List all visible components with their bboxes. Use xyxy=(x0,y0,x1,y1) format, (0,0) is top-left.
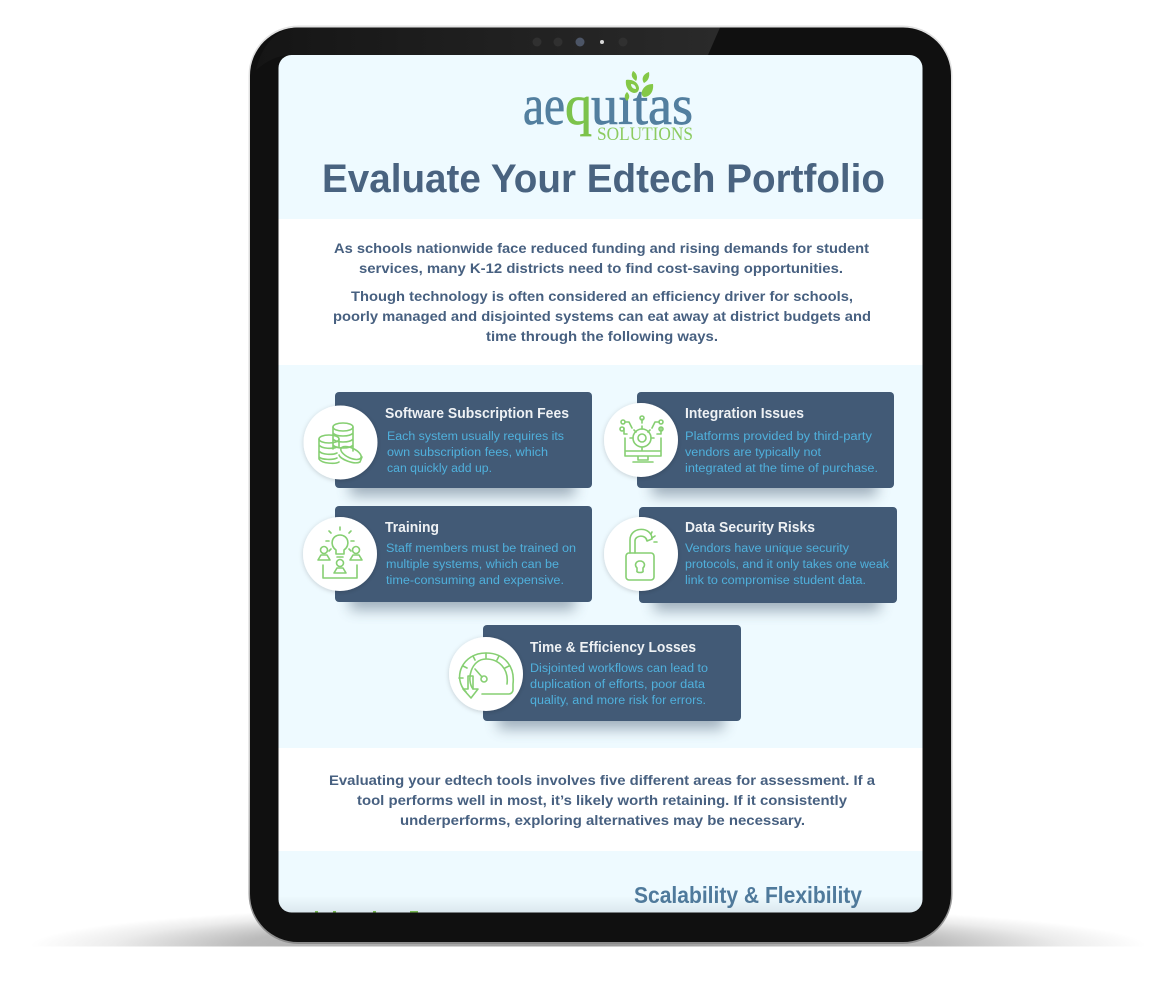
tablet bezel xyxy=(250,28,951,942)
card: software subscription fees: Software Subscription Fees xyxy=(385,406,569,422)
intro text xyxy=(333,241,871,344)
floor shadow xyxy=(66,916,1110,946)
logo: SOLUTIONS xyxy=(597,125,693,145)
tablet outer edge xyxy=(248,26,952,944)
card: integration issues: Platforms provided by third-party xyxy=(685,431,872,443)
logo: q xyxy=(565,75,592,137)
card: integration issues: integrated at the time of purchase. xyxy=(685,463,878,475)
assessment text: Evaluating your edtech tools involves five different areas for assessment. If a xyxy=(329,773,876,788)
card: software subscription fees: can quickly add up. xyxy=(387,463,492,475)
card: training: time-consuming and expensive. xyxy=(386,575,564,587)
intro text: time through the following ways. xyxy=(486,329,718,344)
card: time and efficiency losses: quality, and more risk for errors. xyxy=(530,695,706,707)
assessment text: underperforms, exploring alternatives may be necessary. xyxy=(400,813,805,828)
card: time and efficiency losses: Disjointed workflows can lead to xyxy=(530,663,708,675)
intro text: Though technology is often considered an efficiency driver for schools, xyxy=(351,289,853,304)
icon: monitor with gear xyxy=(620,416,663,462)
card: software subscription fees: own subscription fees, which xyxy=(387,447,548,459)
screen xyxy=(278,55,923,913)
assessment text: tool performs well in most, it’s likely worth retaining. If it consistently xyxy=(357,793,848,808)
card: time and efficiency losses: Time & Efficiency Losses xyxy=(530,640,696,656)
screen bottom fade xyxy=(280,903,922,912)
card: data security risks: Vendors have unique security xyxy=(685,543,849,555)
card: training: Staff members must be trained on xyxy=(386,543,576,555)
title: Evaluate Your Edtech Portfolio xyxy=(322,157,885,201)
card: data security risks xyxy=(604,507,897,611)
card: training: multiple systems, which can be xyxy=(386,559,559,571)
intro text: As schools nationwide face reduced funding and rising demands for student xyxy=(334,241,870,256)
logo xyxy=(523,71,693,145)
intro text: services, many K-12 districts need to find cost-saving opportunities. xyxy=(359,261,843,276)
camera array xyxy=(532,38,628,46)
card: software subscription fees: Each system usually requires its xyxy=(387,431,564,443)
icon: trainer and team xyxy=(318,527,362,578)
card: time and efficiency losses: duplication of efforts, poor data xyxy=(530,679,706,691)
intro text: poorly managed and disjointed systems can eat away at district budgets and xyxy=(333,309,871,324)
card: integration issues xyxy=(604,392,894,496)
icon: speedometer xyxy=(459,653,513,698)
logo leaves xyxy=(620,71,653,101)
card: data security risks: link to compromise student data. xyxy=(685,575,866,587)
card: data security risks: Data Security Risks xyxy=(685,520,815,536)
bezel sheen xyxy=(256,28,720,70)
clipped green heading tops xyxy=(315,911,418,912)
card: integration issues: vendors are typically not xyxy=(685,447,822,459)
icon: open padlock xyxy=(626,529,657,580)
heading: scalability and flexibility: Scalability & Flexibility xyxy=(634,882,862,908)
card: training xyxy=(303,506,592,610)
assessment text xyxy=(329,773,876,828)
tablet device xyxy=(248,26,952,944)
section backgrounds xyxy=(278,55,923,913)
logo: uitas xyxy=(591,75,693,137)
card: integration issues: Integration Issues xyxy=(685,406,804,422)
icon: coins xyxy=(319,423,363,463)
card: training: Training xyxy=(385,520,439,536)
card: software subscription fees xyxy=(304,392,592,496)
logo wordmark: ae xyxy=(523,75,565,137)
card: data security risks: protocols, and it only takes one weak xyxy=(685,559,889,571)
card: time and efficiency losses xyxy=(449,625,741,729)
